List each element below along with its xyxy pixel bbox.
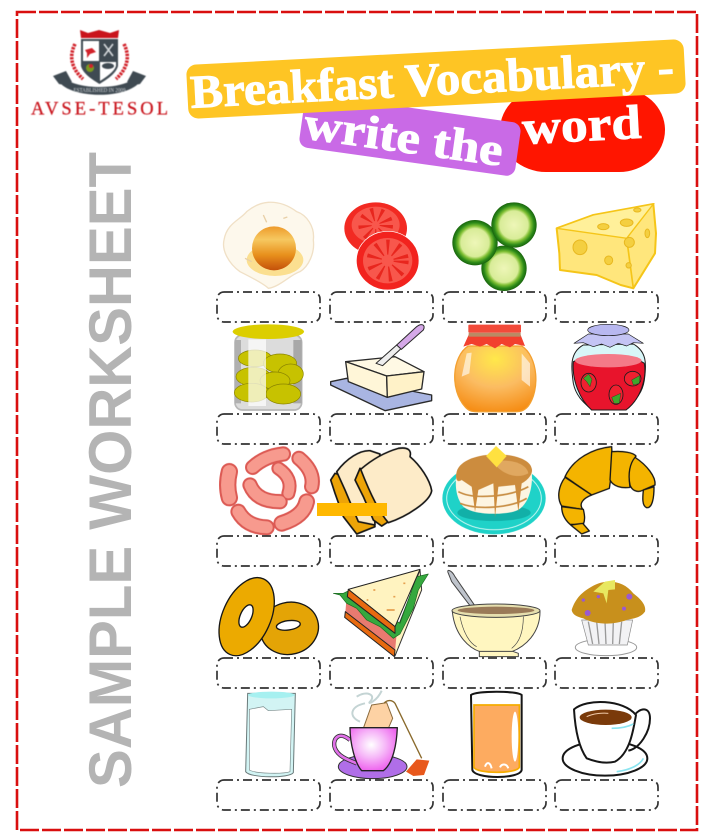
ribbon: established in 2009: ESTABLISHED IN 2009 (74, 88, 126, 94)
icon: pancakes (442, 446, 546, 534)
answer boxes: write the word (217, 292, 658, 810)
icon: tea cup with teabag (334, 691, 429, 779)
orange bar covering part of the bread (317, 503, 387, 516)
icon: butter and knife (331, 325, 432, 411)
icon: cereal bowl (448, 570, 540, 657)
row 3 and 4 food pictures (208, 446, 655, 664)
row 1 and 2 food pictures (224, 202, 656, 412)
title band: purple behind write the: write the (301, 97, 506, 176)
icon: cheese wedge (557, 204, 656, 288)
icon: laurel wreath (72, 44, 127, 79)
icon: crown (80, 30, 119, 38)
icon: sandwich (333, 569, 428, 657)
icon: bread slices (331, 448, 432, 534)
icon: honey jar (455, 325, 536, 412)
logo: AVSE-TESOL crest (31, 30, 168, 120)
icon: croissant (559, 447, 655, 534)
icon: shield (81, 39, 118, 84)
logo wordmark: AVSE-TESOL (31, 100, 168, 120)
icon: tomato slices (344, 202, 419, 290)
icon: jar of pickles (233, 324, 304, 410)
icon: glass of milk (246, 692, 295, 777)
title blob: red behind word (500, 88, 665, 172)
icon: fried egg (224, 202, 314, 288)
icon: coffee cup and saucer (563, 702, 650, 776)
icon: blueberry muffin (572, 580, 645, 656)
watermark: SAMPLE WORKSHEET: SAMPLE WORKSHEET (77, 152, 144, 788)
icon: cucumber slices (452, 202, 537, 291)
row 5 drink pictures (246, 691, 650, 779)
title: Breakfast Vocabulary - write the word (186, 39, 686, 178)
icon: sausages (228, 454, 312, 527)
title word: word (521, 96, 643, 155)
icon: strawberry jam jar (572, 324, 646, 410)
icon: bagels (208, 569, 324, 664)
title band: yellow: Breakfast Vocabulary - (189, 42, 675, 119)
icon: orange juice glass (471, 692, 522, 777)
